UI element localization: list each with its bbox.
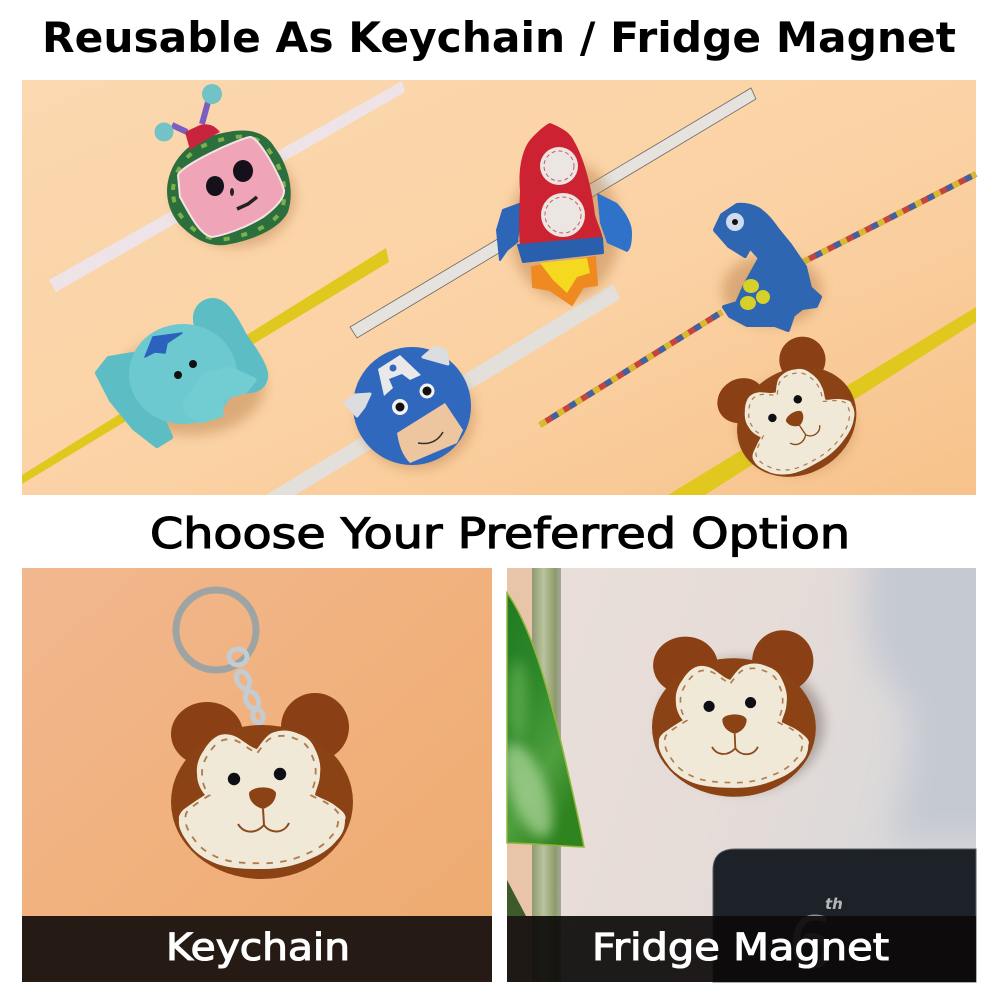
icon: monkey magnet bbox=[651, 628, 818, 798]
small dark leaf bbox=[507, 880, 526, 916]
icon: dinosaur bbox=[715, 205, 820, 330]
heading: choose option: Choose Your Preferred Option bbox=[150, 509, 850, 558]
icon: watermelon character bbox=[154, 84, 291, 245]
panel: rakhi collection photo bbox=[22, 80, 976, 498]
device screen: th bbox=[825, 895, 843, 913]
brushed metal reflection bbox=[856, 568, 976, 843]
device screen bbox=[713, 849, 976, 985]
icon: monkey magnet shadow bbox=[660, 659, 824, 791]
title: Reusable As Keychain / Fridge Magnet bbox=[42, 13, 956, 62]
white strap: top left bbox=[49, 81, 405, 292]
white strap: centre bbox=[266, 284, 620, 495]
icon: captain america bbox=[345, 347, 471, 465]
icon: monkey keychain bbox=[171, 693, 353, 879]
toy shadows bbox=[115, 147, 854, 473]
device screen: 6 bbox=[788, 901, 834, 985]
yellow strap: right bbox=[668, 307, 976, 495]
caption bar: keychain: Keychain bbox=[166, 926, 350, 969]
panel: keychain photo bbox=[22, 568, 492, 982]
icon: monkey rakhi bbox=[706, 327, 876, 498]
icon: green leaf bbox=[506, 590, 585, 848]
braided cord bbox=[540, 174, 976, 425]
caption bar: fridge magnet: Fridge Magnet bbox=[592, 926, 889, 969]
icon: chain bbox=[229, 649, 265, 724]
caption bar: fridge magnet bbox=[507, 916, 976, 982]
icon: elephant bbox=[98, 298, 268, 445]
icon: key ring bbox=[176, 590, 256, 670]
panel: fridge magnet photo bbox=[506, 568, 976, 982]
yellow strap: left bbox=[22, 248, 389, 484]
caption bar: keychain bbox=[22, 916, 492, 982]
icon: rocket bbox=[497, 123, 632, 305]
white strap: top centre bbox=[350, 88, 756, 338]
